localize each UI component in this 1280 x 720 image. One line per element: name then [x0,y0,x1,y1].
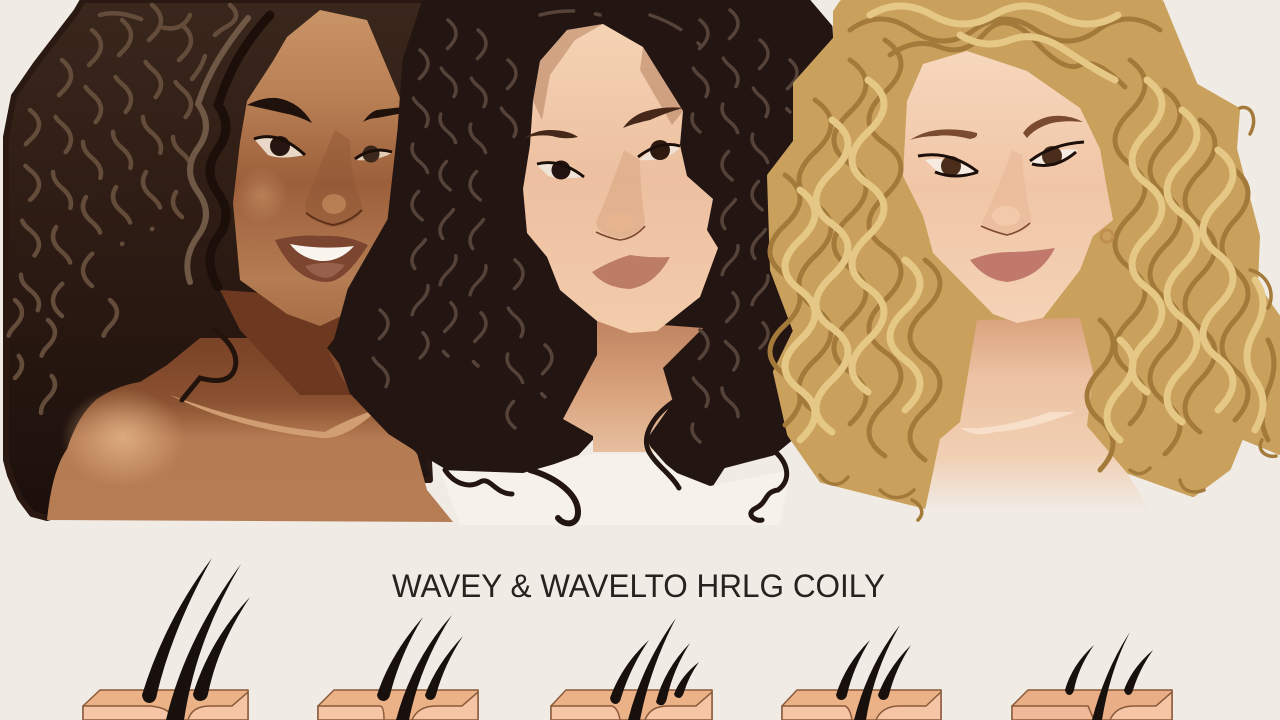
skin block [782,690,941,720]
hair shafts [836,625,911,720]
temple shadow [533,24,683,125]
hair mass left [6,0,430,518]
skin block [551,690,712,720]
neck shadow [220,290,365,395]
diagram: hair follicle wavey [83,558,250,720]
skin block [1012,690,1172,720]
earring [1101,230,1113,242]
loose curls at ends [820,107,1276,520]
hair strands [8,5,236,424]
hair mass right [770,3,1280,506]
eyes [254,136,392,162]
diagram: hair follicle wavy [318,615,478,720]
hanging curls [415,402,787,523]
eyebrows [523,107,683,139]
diagram: hair follicle tight coily [1012,632,1172,720]
lips and teeth [275,236,368,282]
title: WAVEY & WAVELTO HRLG COILY [392,568,885,604]
portrait: dark wavy-haired woman [6,0,453,522]
face [523,24,718,333]
portrait: black curly-haired woman [335,0,840,525]
cheek highlight [236,167,288,223]
hair shafts [377,615,463,720]
hair shafts [610,618,699,720]
eyes [918,142,1084,176]
hair mass middle [335,0,840,486]
eyes [537,140,680,180]
chest fade [925,318,1150,510]
eyebrows [247,98,403,123]
hair shafts [1065,632,1153,720]
skin block [318,690,478,720]
collar light [170,395,380,438]
eyebrows [910,116,1083,140]
nose [981,150,1032,235]
lips [970,248,1055,282]
white garment area [440,454,790,525]
nose [596,150,645,240]
diagram: hair follicle coily [782,625,941,720]
strands framing the face [182,15,270,400]
diagram: hair follicle curly [551,618,712,720]
chest and shoulder [47,338,453,522]
collar highlight [960,412,1075,434]
shoulder highlight [61,388,185,488]
hair strands light [785,6,1263,440]
hair strands dark [770,19,1274,470]
face [903,51,1113,323]
hair shafts [142,558,250,720]
hair strands [372,10,797,442]
skin block [83,690,248,720]
face [233,10,403,326]
lips [592,255,670,289]
neck [563,320,703,452]
nose [305,130,362,227]
portrait: blonde curly-haired woman [770,3,1280,520]
